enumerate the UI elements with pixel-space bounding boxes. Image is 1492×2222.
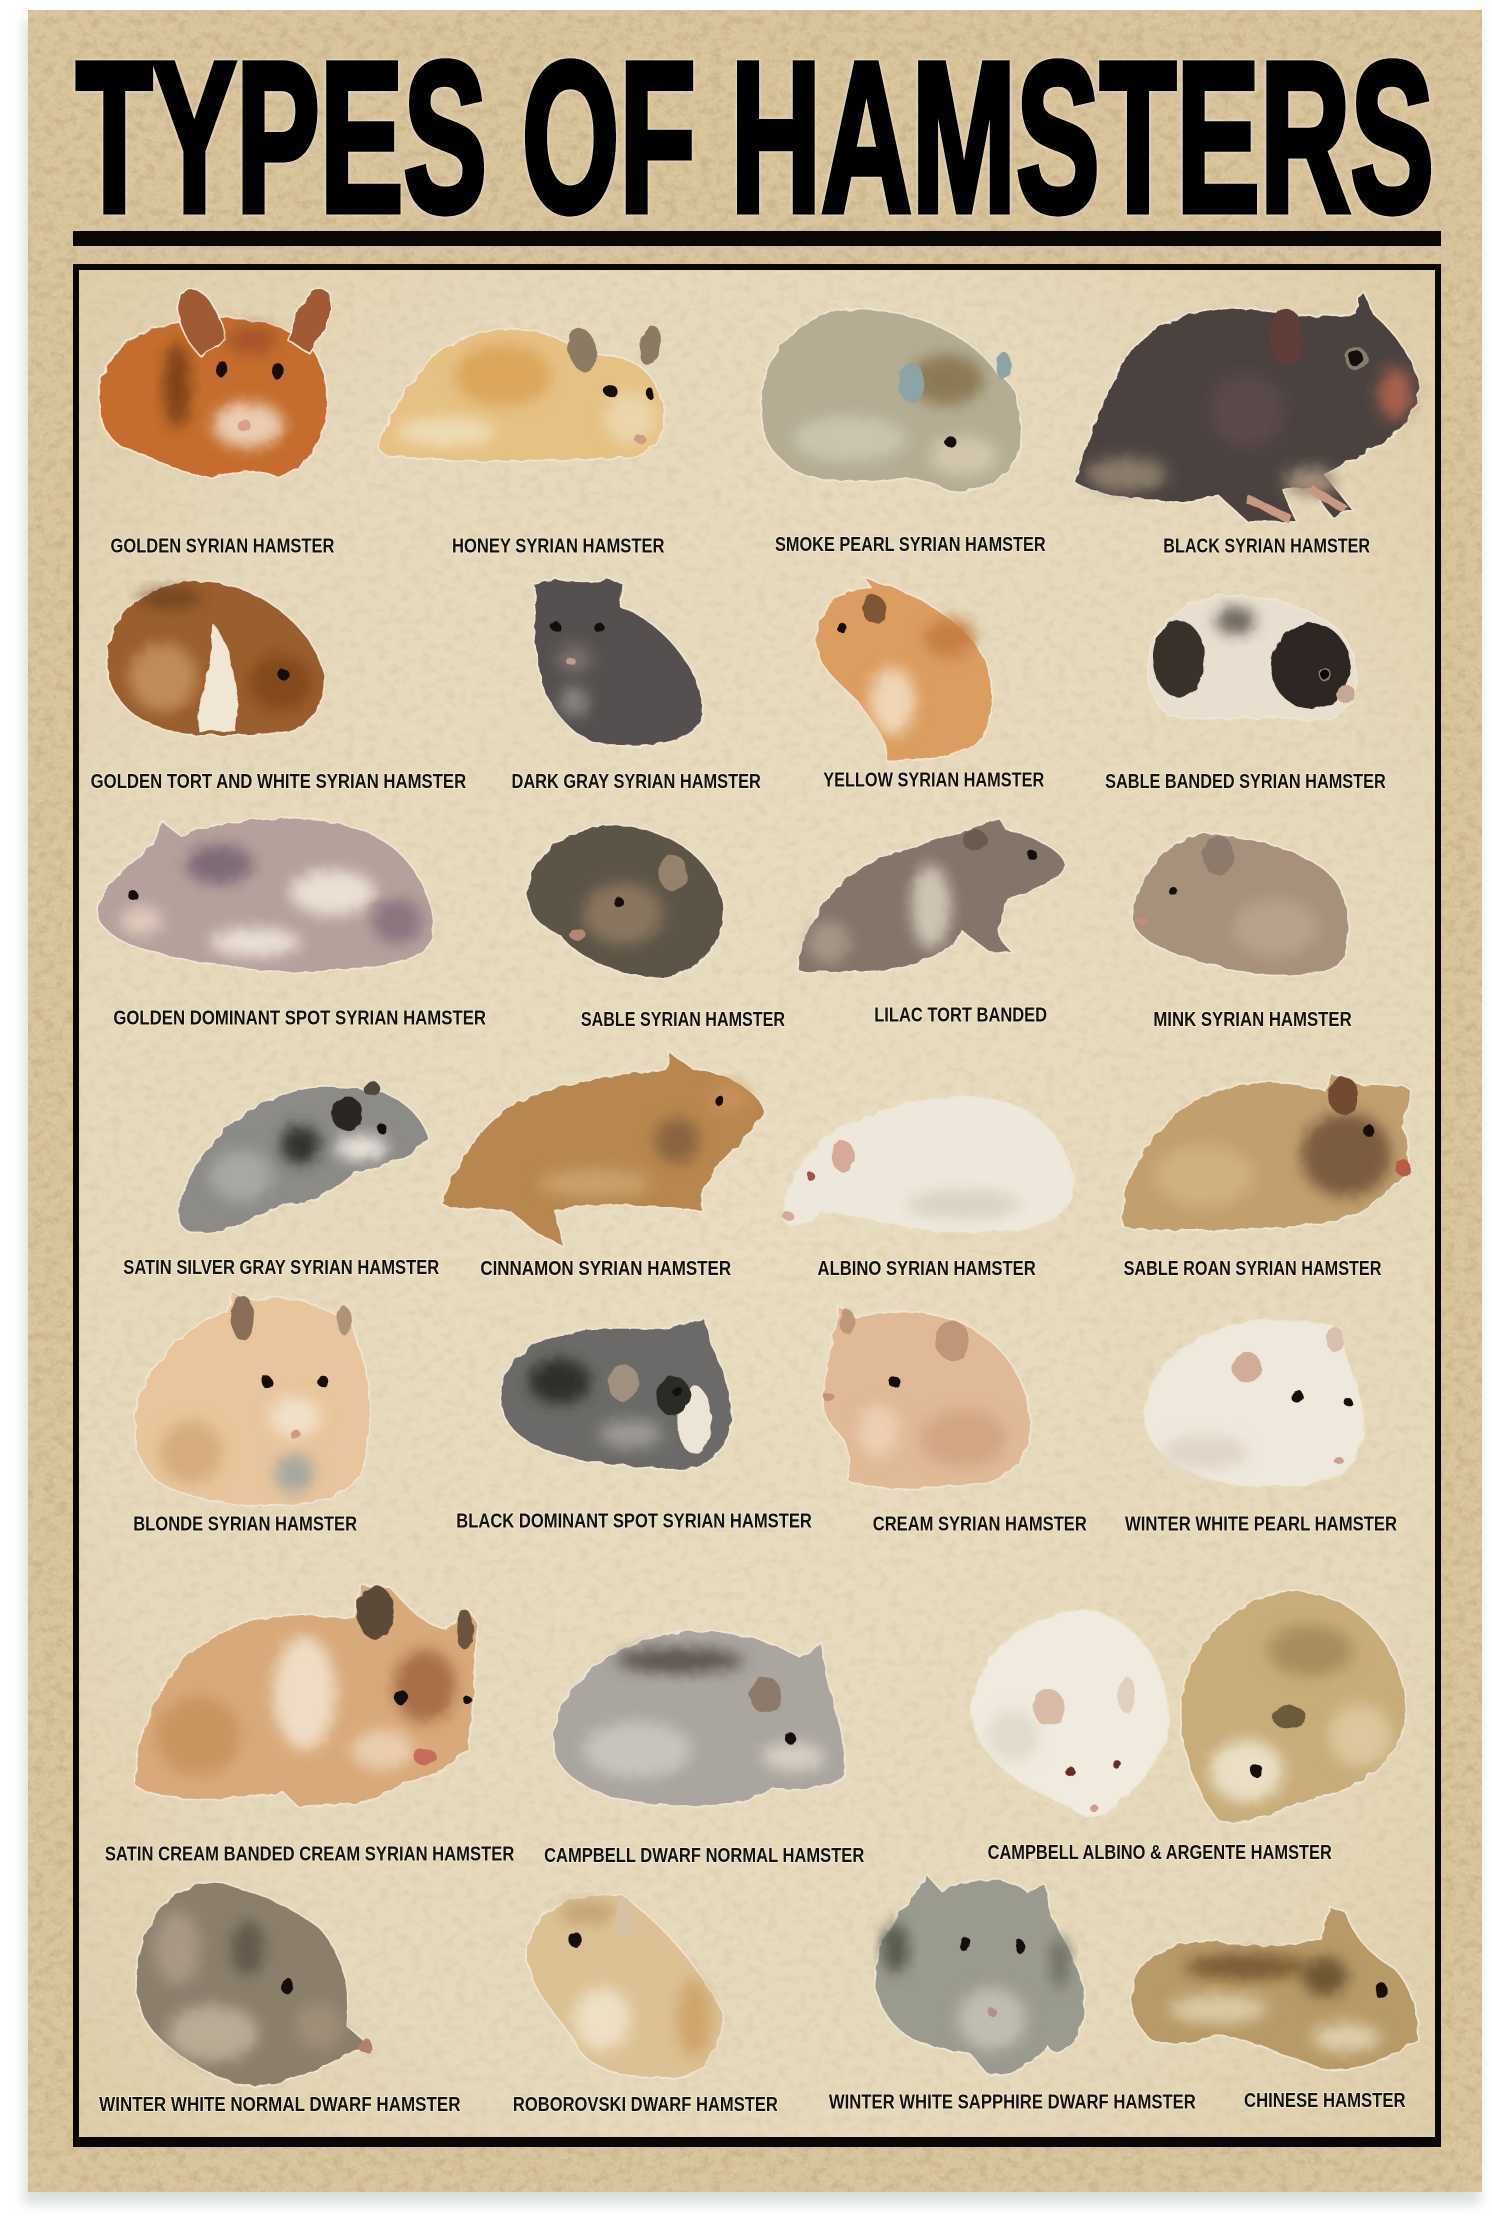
label: blonde: BLONDE SYRIAN HAMSTER — [133, 1513, 357, 1535]
label: black dominant spot: BLACK DOMINANT SPOT SYRIAN HAMSTER — [456, 1510, 812, 1532]
label: mink syrian: MINK SYRIAN HAMSTER — [1153, 1009, 1352, 1031]
hamster: cinnamon — [442, 1051, 765, 1247]
label: roborovski: ROBOROVSKI DWARF HAMSTER — [513, 2094, 778, 2116]
label: winter white sapphire: WINTER WHITE SAPPHIRE DWARF HAMSTER — [829, 2091, 1196, 2113]
label: sable roan: SABLE ROAN SYRIAN HAMSTER — [1124, 1258, 1382, 1280]
hamster: cream syrian — [823, 1306, 1031, 1489]
label: smoke pearl: SMOKE PEARL SYRIAN HAMSTER — [775, 534, 1046, 556]
hamster: golden syrian — [99, 289, 331, 477]
label: winter white normal dwarf: WINTER WHITE NORMAL DWARF HAMSTER — [99, 2094, 461, 2116]
hamster: mink syrian — [1132, 833, 1349, 975]
hamster: smoke pearl — [761, 309, 1021, 492]
label: golden syrian: GOLDEN SYRIAN HAMSTER — [111, 536, 335, 558]
panel: hamster frame — [73, 267, 1441, 2147]
label: sable syrian: SABLE SYRIAN HAMSTER — [581, 1009, 785, 1031]
label: yellow syrian: YELLOW SYRIAN HAMSTER — [823, 769, 1045, 791]
hamster: sable banded — [1148, 595, 1357, 720]
label: dark gray: DARK GRAY SYRIAN HAMSTER — [512, 771, 761, 793]
hamster: blonde syrian — [135, 1292, 370, 1505]
title rule — [73, 231, 1441, 246]
label: satin cream banded: SATIN CREAM BANDED CREAM SYRIAN HAMSTER — [105, 1843, 515, 1865]
label: satin silver gray: SATIN SILVER GRAY SYRIAN HAMSTER — [123, 1257, 440, 1279]
hamster: chinese — [1131, 1906, 1418, 2072]
label: campbell albino and argente: CAMPBELL ALBINO & ARGENTE HAMSTER — [988, 1842, 1332, 1864]
label: golden dominant spot: GOLDEN DOMINANT SPOT SYRIAN HAMSTER — [113, 1007, 486, 1029]
label: cream: CREAM SYRIAN HAMSTER — [873, 1513, 1087, 1535]
hamster: black syrian — [1074, 290, 1420, 521]
label: chinese: CHINESE HAMSTER — [1244, 2090, 1406, 2112]
hamster: roborovski — [526, 1895, 723, 2078]
label: sable banded: SABLE BANDED SYRIAN HAMSTER — [1105, 771, 1386, 793]
hamster: satin silver gray — [177, 1081, 428, 1233]
hamster: winter white sapphire — [874, 1876, 1085, 2076]
hamster: honey syrian — [378, 324, 664, 461]
hamster: black dominant spot — [500, 1318, 732, 1470]
hamster: dark gray — [533, 578, 704, 746]
hamster: campbell dwarf normal — [553, 1631, 845, 1806]
hamster: winter white normal dwarf — [136, 1882, 373, 2087]
label: lilac tort banded: LILAC TORT BANDED — [874, 1005, 1047, 1027]
label: honey syrian: HONEY SYRIAN HAMSTER — [452, 536, 665, 558]
label: cinnamon: CINNAMON SYRIAN HAMSTER — [480, 1258, 732, 1280]
label: winter white pearl: WINTER WHITE PEARL HAMSTER — [1125, 1513, 1397, 1535]
hamster: winter white pearl — [1145, 1321, 1364, 1486]
hamster: sable roan — [1122, 1074, 1411, 1231]
hamster: golden tort and white — [106, 581, 325, 736]
hamster: golden dominant spot — [96, 818, 433, 972]
hamster: argente — [1180, 1591, 1407, 1823]
hamster: yellow syrian — [816, 578, 992, 761]
hamster: albino syrian — [782, 1097, 1073, 1232]
label: black syrian: BLACK SYRIAN HAMSTER — [1163, 536, 1371, 558]
hamster: lilac tort banded — [798, 818, 1066, 972]
hamster: campbell albino — [972, 1610, 1169, 1816]
label: albino: ALBINO SYRIAN HAMSTER — [818, 1258, 1036, 1280]
hamster: sable syrian — [527, 825, 724, 978]
label: campbell dwarf normal: CAMPBELL DWARF NORMAL HAMSTER — [544, 1845, 865, 1867]
hamster: satin cream banded — [135, 1584, 477, 1807]
label: golden tort and white: GOLDEN TORT AND WHITE SYRIAN HAMSTER — [91, 771, 467, 793]
